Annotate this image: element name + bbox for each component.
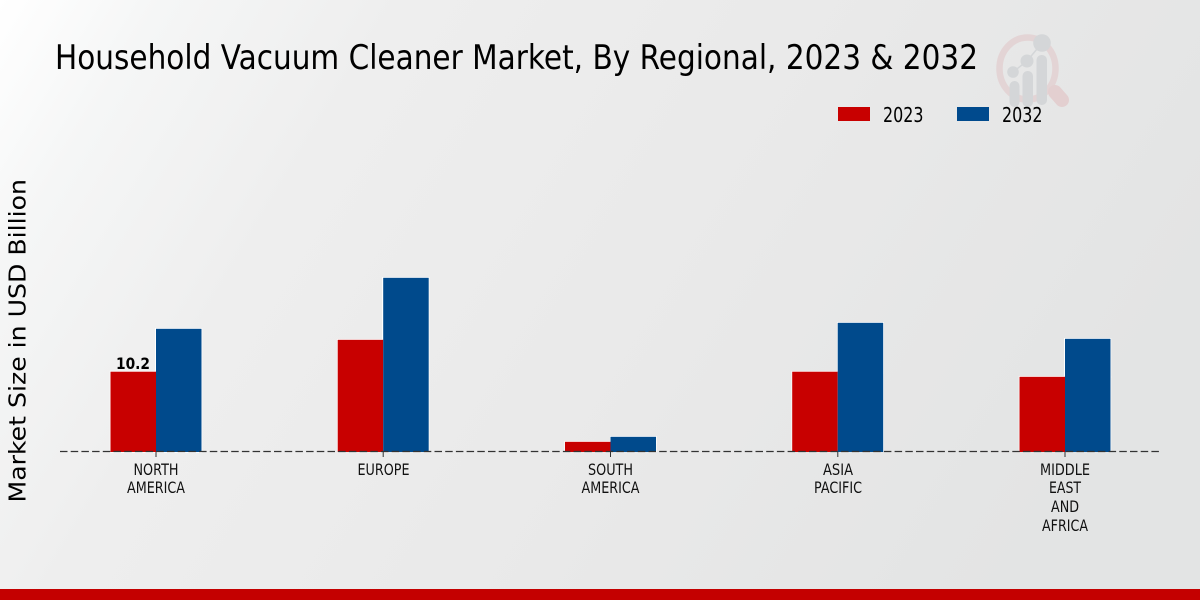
category label: Asia Pacific: PACIFIC (814, 478, 862, 497)
bar chart (60, 277, 1159, 457)
category label: South America: AMERICA (582, 478, 640, 497)
category label: North America: NORTH (134, 460, 178, 479)
data label: 10.2: 10.2 (116, 354, 150, 373)
category label: Middle East and Africa: AND (1051, 497, 1079, 516)
category label: Middle East and Africa: AFRICA (1042, 516, 1088, 535)
bars: Asia Pacific (792, 322, 884, 452)
bars: Europe (337, 277, 429, 452)
icon: watermark logo (1000, 34, 1062, 107)
category label: Asia Pacific: ASIA (823, 460, 853, 479)
bars: North America (110, 328, 202, 453)
category label: North America (127, 460, 185, 497)
category label: South America: SOUTH (588, 460, 633, 479)
category label: Middle East and Africa: EAST (1049, 478, 1081, 497)
category label: Europe: EUROPE (358, 460, 410, 479)
legend (838, 103, 1042, 127)
category label: North America: AMERICA (127, 478, 185, 497)
legend item: 2023 (838, 103, 924, 127)
footer bar (0, 589, 1200, 600)
y-axis title: Market Size in USD Billion (6, 179, 32, 502)
bars: South America (564, 436, 657, 452)
category label: Asia Pacific (814, 460, 862, 497)
bars: Middle East and Africa (1019, 338, 1111, 452)
legend item: 2032 (957, 103, 1042, 127)
category label: South America (582, 460, 640, 497)
legend item: 2032: 2032 (1002, 103, 1042, 127)
category label: Middle East and Africa: MIDDLE (1040, 460, 1090, 479)
title: Household Vacuum Cleaner Market, By Regional, 2023 & 2032 (55, 38, 978, 78)
category label: Middle East and Africa (1040, 460, 1090, 535)
legend item: 2023: 2023 (883, 103, 924, 127)
